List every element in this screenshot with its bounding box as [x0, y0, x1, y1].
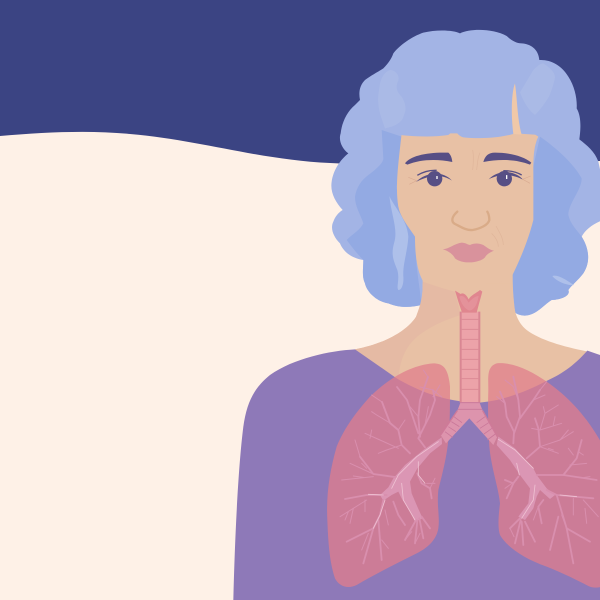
hair: outer silhouette [331, 30, 600, 316]
eye: right [489, 171, 531, 186]
left primary branches [345, 377, 435, 563]
hair: right strand [552, 276, 574, 285]
nose [452, 212, 489, 230]
hair: top bangs [397, 63, 543, 138]
left highlights [368, 442, 438, 528]
neck [415, 273, 517, 320]
hair: darker right locks [512, 137, 588, 316]
neck shadow [355, 283, 461, 380]
right primary branches [500, 377, 597, 563]
eyebrow: right [483, 153, 531, 165]
neck shadow [415, 282, 460, 320]
cheek wrinkles [492, 226, 503, 247]
eyebrow: left [405, 153, 452, 165]
right highlights [498, 439, 577, 518]
right secondary twigs [497, 380, 598, 537]
eye: left [408, 170, 452, 186]
hair: parting [512, 83, 522, 135]
bronchial tree: left lung [340, 370, 442, 563]
lung: left [327, 363, 450, 587]
left main stem [380, 437, 442, 522]
lips [443, 243, 494, 262]
hair: right highlight [520, 63, 555, 115]
figure: shoulders and lungs [233, 283, 600, 600]
larynx [455, 290, 482, 313]
lung: right [488, 363, 600, 588]
left secondary twigs [340, 370, 442, 550]
figure: hair and face [331, 30, 600, 320]
face [397, 133, 538, 292]
hair: darker left locks [347, 130, 422, 307]
bronchial tree: right lung [497, 377, 598, 563]
right main stem [497, 437, 555, 520]
background: cream wave [0, 132, 600, 600]
bronchi: main split [441, 402, 497, 445]
garment [233, 349, 600, 600]
hair: strand [389, 196, 408, 290]
trachea [461, 312, 479, 403]
neck and chest skin [355, 283, 600, 447]
forehead wrinkles [473, 150, 480, 170]
hair: left highlight [378, 70, 406, 128]
